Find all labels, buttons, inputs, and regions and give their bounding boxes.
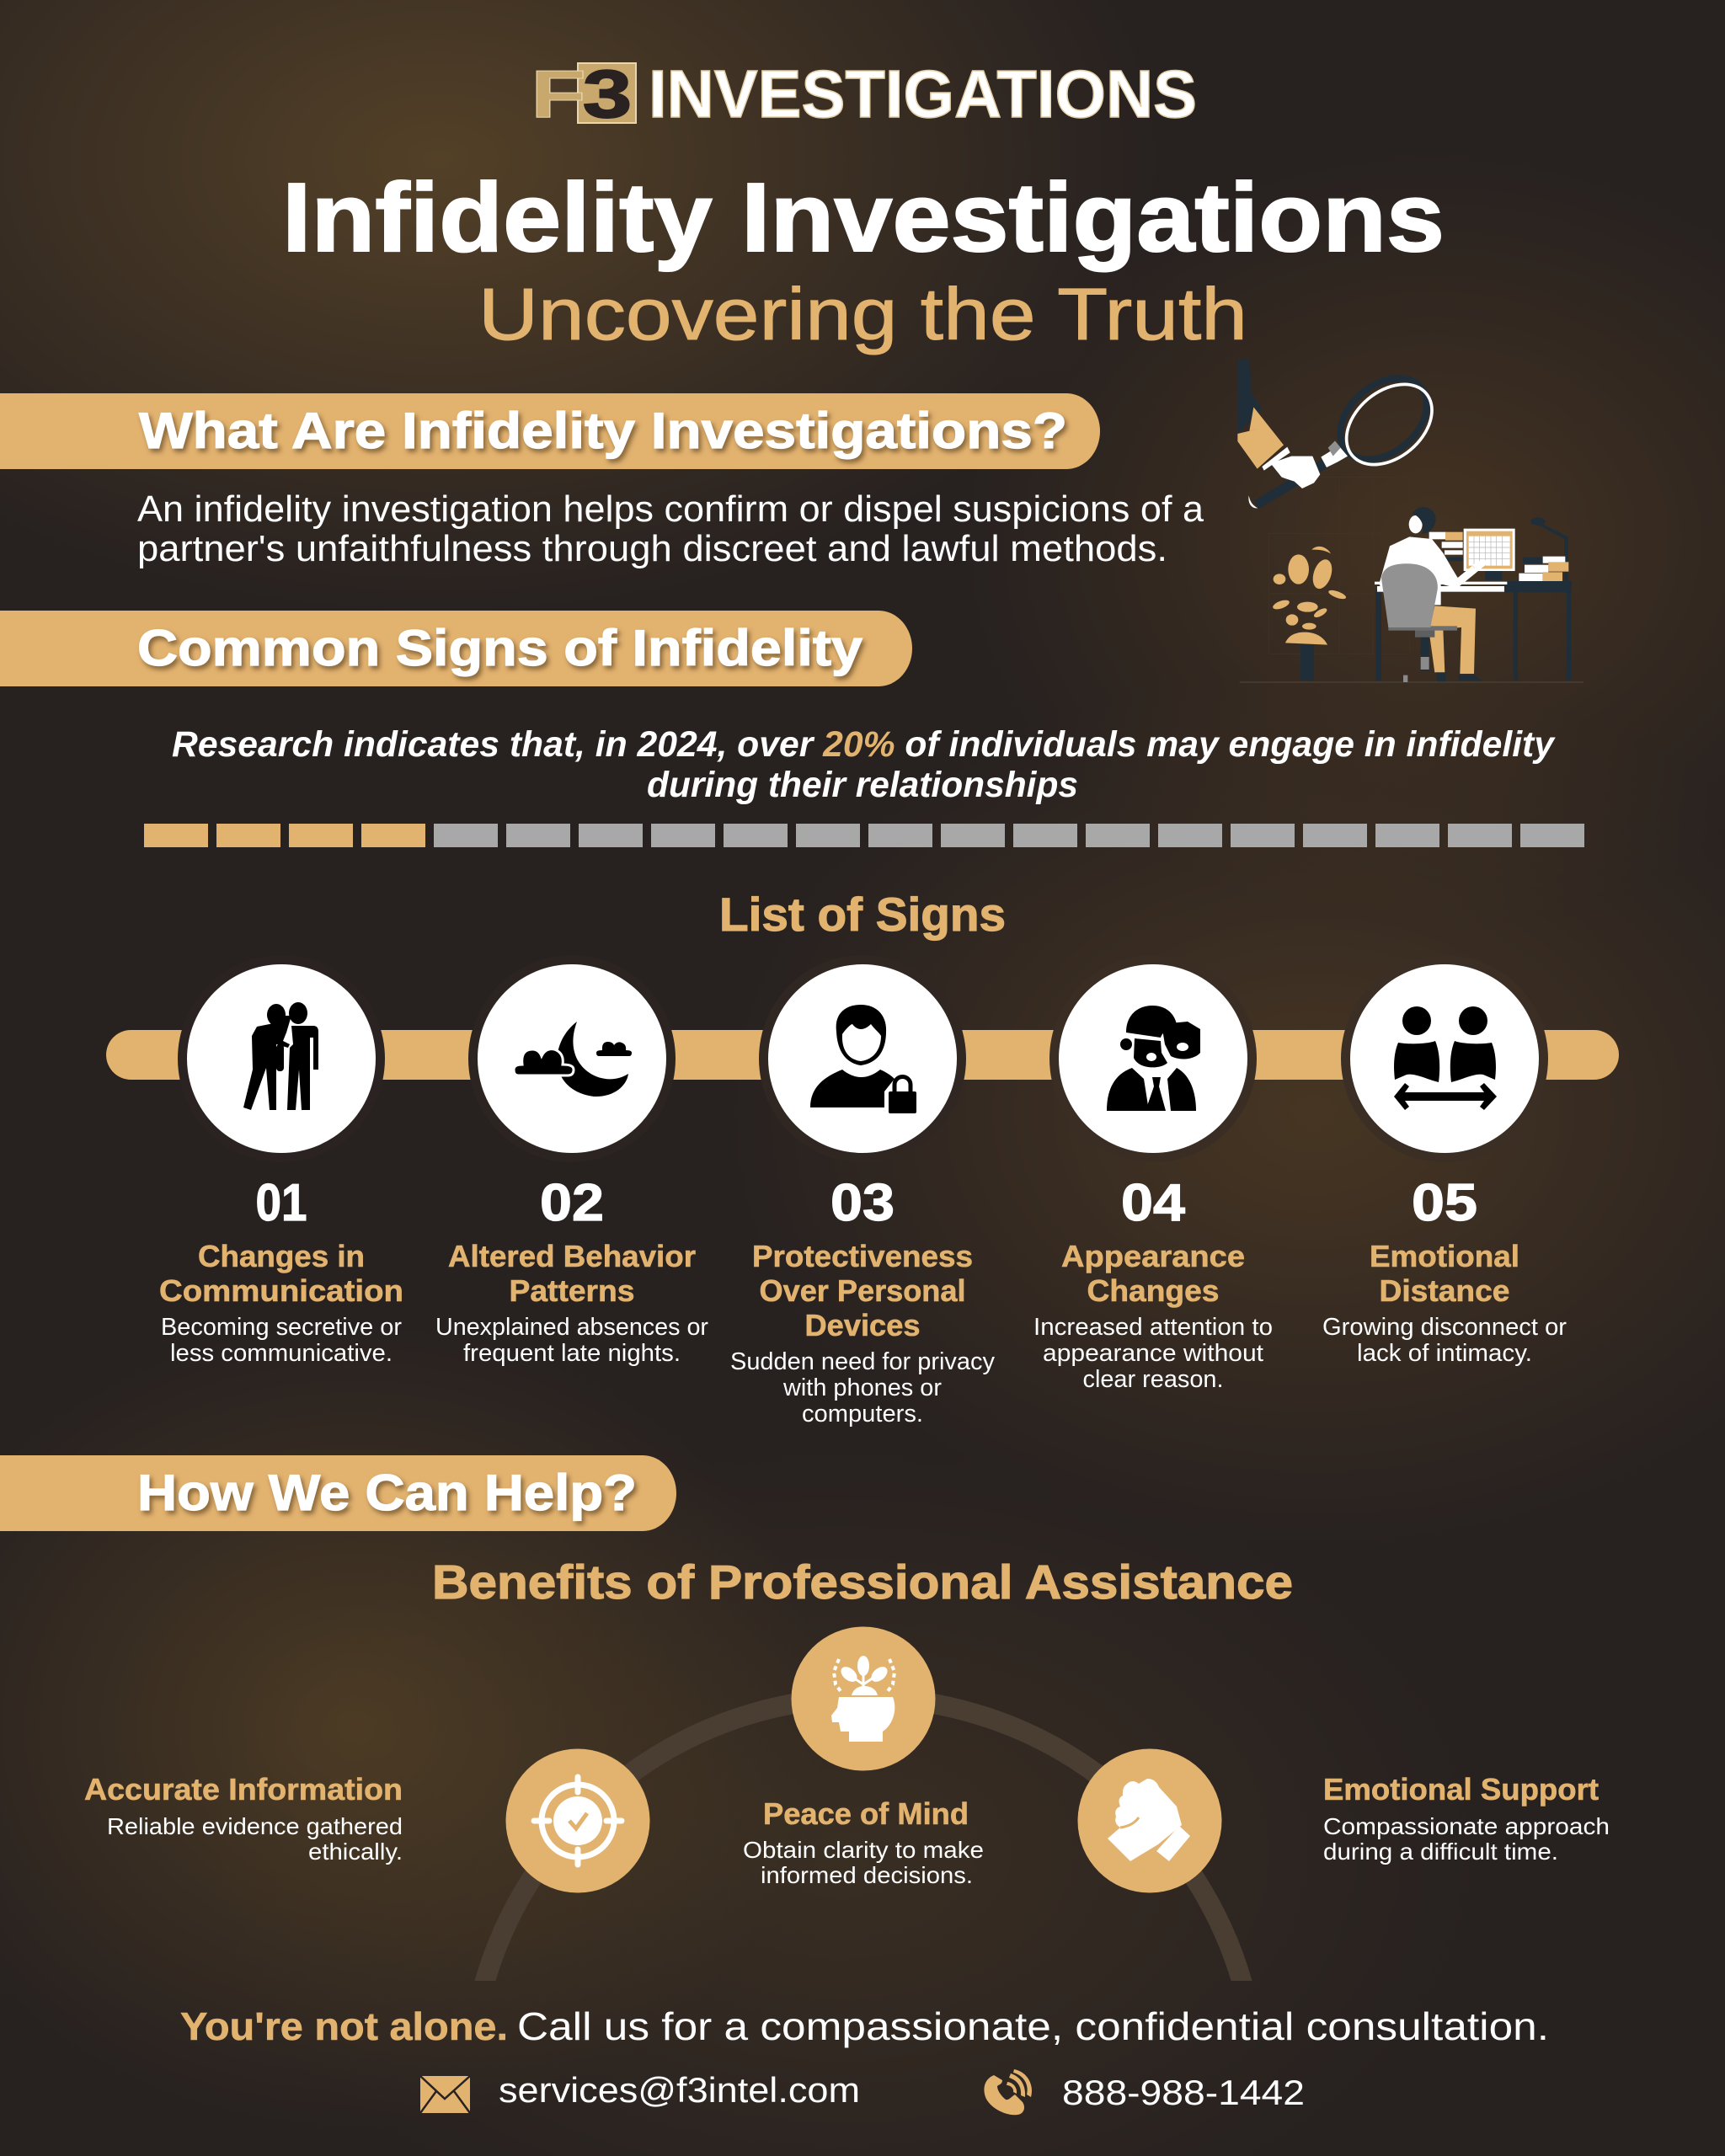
sign 03: Over Personal [760, 1273, 965, 1308]
benefit: emotional support: Compassionate approach [1323, 1813, 1610, 1839]
sign 03: Protectiveness [752, 1239, 973, 1273]
benefit: peace of mind [743, 1627, 984, 1888]
benefit: emotional support: Emotional Support [1323, 1772, 1599, 1806]
sign 05: lack of intimacy. [1357, 1340, 1532, 1367]
sign 04 [1033, 964, 1273, 1393]
benefit: accurate information: Reliable evidence gathered [107, 1813, 403, 1839]
call to action [180, 2004, 1549, 2048]
monitor [1464, 529, 1515, 580]
sign 03: computers. [802, 1401, 923, 1428]
desk [1375, 517, 1572, 680]
subtitle: Uncovering the Truth [478, 274, 1247, 355]
sign 01: Communication [159, 1273, 403, 1308]
sign 05: Emotional [1370, 1239, 1519, 1273]
sign 04: clear reason. [1083, 1366, 1223, 1393]
icon: moon and clouds [514, 1022, 632, 1097]
call to action: You're not alone. [180, 2004, 508, 2048]
sign 03: Sudden need for privacy [730, 1348, 995, 1375]
intro paragraph: An infidelity investigation helps confirm or dispel suspicions of a [137, 488, 1204, 530]
sign 02: Patterns [509, 1273, 635, 1308]
section banner: what are infidelity investigations [0, 393, 1100, 469]
logo: 3 [583, 56, 632, 131]
sign 04: Changes [1087, 1273, 1220, 1308]
contact: phone [984, 2069, 1305, 2115]
sign 04: Increased attention to [1033, 1314, 1273, 1341]
icon: telephone [984, 2069, 1032, 2115]
icon: man with mask [1107, 1006, 1200, 1111]
section banner: how we can help: How We Can Help? [137, 1465, 637, 1521]
sign 04: Appearance [1061, 1239, 1245, 1273]
title: Infidelity Investigations [282, 163, 1445, 272]
magnifying glass [1237, 360, 1448, 509]
sign 01: 01 [256, 1174, 307, 1232]
call to action: Call us for a compassionate, confidential consultation. [517, 2004, 1549, 2048]
timeline bar [106, 1030, 1619, 1080]
icon: clasped hands [1108, 1779, 1190, 1861]
section banner: common signs: Common Signs of Infidelity [137, 620, 863, 676]
sign 02: Altered Behavior [448, 1239, 696, 1273]
timeline node rings [178, 955, 1548, 1162]
icon: person with padlock [810, 1005, 916, 1113]
benefit: emotional support [1078, 1748, 1610, 1893]
sign 02: 02 [540, 1174, 604, 1232]
sign 05: Growing disconnect or [1322, 1314, 1567, 1341]
benefit: accurate information: ethically. [308, 1838, 403, 1865]
binders [1429, 532, 1568, 581]
heading: benefits: Benefits of Professional Assistance [432, 1556, 1293, 1609]
icon: whispering couple [243, 1002, 318, 1110]
sign 01 [159, 964, 403, 1367]
sign 02: frequent late nights. [463, 1340, 681, 1367]
benefit: emotional support: during a difficult time. [1323, 1838, 1558, 1865]
sign 02: Unexplained absences or [435, 1314, 708, 1341]
section banner: how we can help [0, 1455, 676, 1531]
benefit: peace of mind: Obtain clarity to make [743, 1837, 984, 1863]
decorative arc connecting benefits [481, 1698, 1246, 1996]
research statement [172, 724, 1556, 805]
sign 04: appearance without [1043, 1340, 1263, 1367]
sign 05: Distance [1380, 1273, 1509, 1308]
office chair [1381, 563, 1457, 682]
research statement: during their relationships [647, 765, 1078, 805]
contact: email: services@f3intel.com [499, 2070, 860, 2110]
intro paragraph: partner's unfaithfulness through discreet and lawful methods. [137, 528, 1167, 569]
benefit: peace of mind: informed decisions. [761, 1862, 973, 1888]
heading: list of signs: List of Signs [719, 888, 1006, 941]
sign 01: Becoming secretive or [161, 1314, 402, 1341]
sign 04: 04 [1121, 1174, 1186, 1232]
logo: INVESTIGATIONS [649, 56, 1197, 131]
sign 05: 05 [1412, 1174, 1477, 1232]
icon: target check [534, 1777, 622, 1865]
illustration: investigator at desk with magnifying glass [1237, 360, 1583, 682]
intro paragraph [137, 488, 1204, 569]
benefit: peace of mind: Peace of Mind [763, 1796, 969, 1831]
sign 03 [730, 964, 995, 1428]
benefit: accurate information: Accurate Information [84, 1772, 403, 1806]
icon: envelope [420, 2076, 470, 2113]
sign 03: with phones or [782, 1374, 942, 1401]
icon: two people with distance arrow [1394, 1006, 1497, 1110]
section banner: what are infidelity investigations: What Are Infidelity Investigations? [139, 403, 1067, 459]
sign 01: less communicative. [170, 1340, 393, 1367]
logo: F [531, 56, 586, 131]
icon: head with growing plant [831, 1656, 895, 1742]
sign 03: Devices [805, 1308, 920, 1342]
person [1379, 507, 1488, 681]
benefit: accurate information [84, 1748, 650, 1893]
plant [1272, 547, 1347, 680]
20 percent progress bar [144, 824, 1584, 847]
sign 01: Changes in [198, 1239, 365, 1273]
sign 02 [435, 964, 708, 1367]
sign 05 [1322, 964, 1567, 1367]
research statement: Research indicates that, in 2024, over 20% of individuals may engage in infidelity [172, 724, 1556, 765]
section banner: common signs [0, 611, 912, 686]
contact: phone: 888-988-1442 [1062, 2073, 1305, 2112]
sign 03: 03 [830, 1174, 895, 1232]
